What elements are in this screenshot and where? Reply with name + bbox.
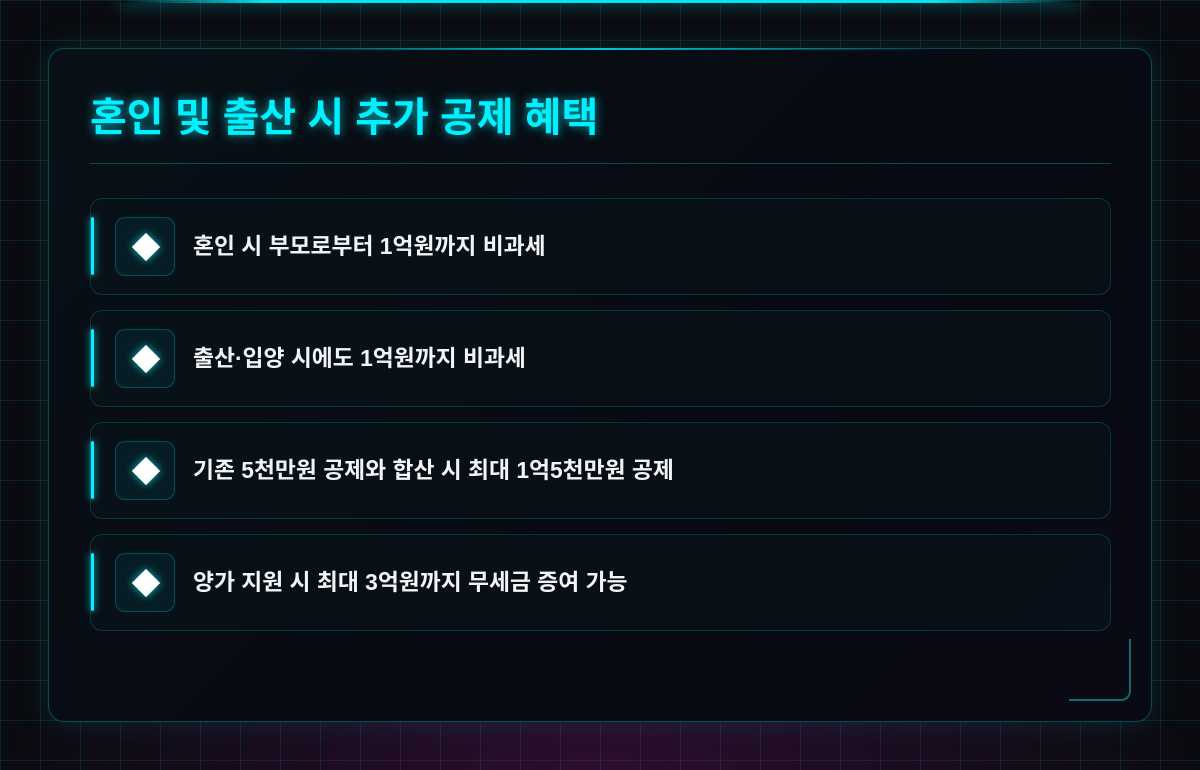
icon: diamond xyxy=(115,441,175,500)
text: 출산·입양 시에도 1억원까지 비과세 xyxy=(193,345,526,371)
icon: diamond xyxy=(115,553,175,612)
top glow line xyxy=(120,0,1080,3)
item 1 xyxy=(90,198,1111,295)
item 3 xyxy=(90,422,1111,519)
corner bracket xyxy=(1069,639,1131,701)
icon: diamond xyxy=(115,217,175,276)
icon: diamond xyxy=(115,329,175,388)
title: 혼인 및 출산 시 추가 공제 혜택 xyxy=(90,96,598,140)
text: 기존 5천만원 공제와 합산 시 최대 1억5천만원 공제 xyxy=(193,457,674,483)
item 2 xyxy=(90,310,1111,407)
text: 양가 지원 시 최대 3억원까지 무세금 증여 가능 xyxy=(193,569,628,595)
text: 혼인 시 부모로부터 1억원까지 비과세 xyxy=(193,233,546,259)
item 4 xyxy=(90,534,1111,631)
